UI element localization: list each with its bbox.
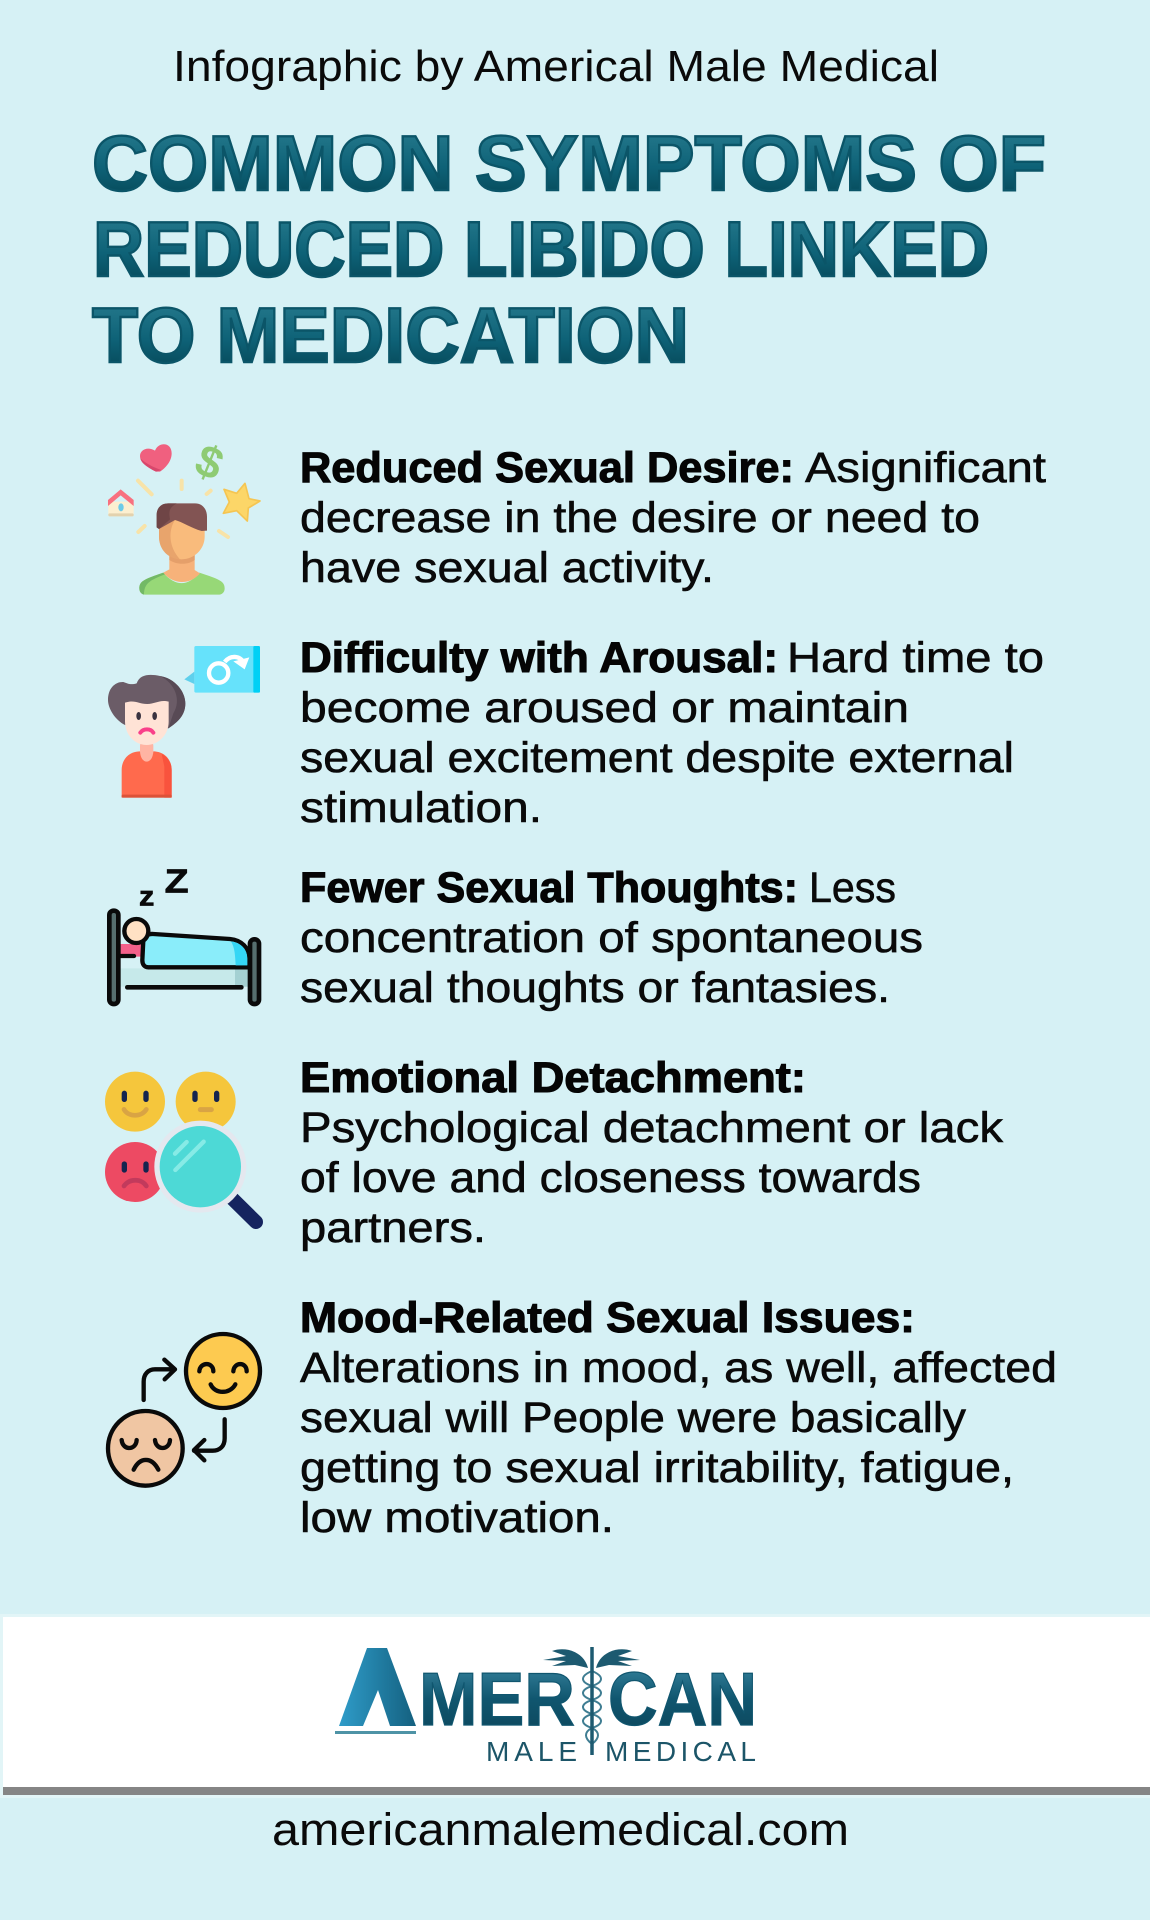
symptom 5: mood-related sexual issues: Alterations in mood, as well, affected (300, 1344, 1057, 1392)
symptom 1: reduced sexual desire: have sexual activity. (300, 544, 714, 592)
title: COMMON SYMPTOMS OF (92, 119, 1046, 207)
symptom 1: reduced sexual desire: Asignificant (805, 444, 1046, 492)
logo: American Male Medical: MALE (486, 1736, 577, 1767)
title (92, 119, 1046, 379)
symptom 3: fewer sexual thoughts: concentration of spontaneous (300, 914, 923, 962)
symptom 4: emotional detachment: partners. (300, 1204, 486, 1252)
icon: emotion faces with magnifying glass (105, 1072, 256, 1222)
icon: mood swing faces with arrows (108, 1334, 260, 1486)
symptom 2: difficulty with arousal: Hard time to (787, 634, 1044, 682)
symptom 4: emotional detachment (300, 1054, 1004, 1252)
logo: American Male Medical: MER (419, 1657, 575, 1741)
symptom 2: difficulty with arousal: become aroused or maintain (300, 684, 909, 732)
symptom 3: fewer sexual thoughts: Fewer Sexual Thoughts: (300, 864, 798, 912)
symptom 1: reduced sexual desire: Reduced Sexual Desire: (300, 444, 794, 492)
icon: person sleeping in bed (109, 864, 259, 1004)
symptom 5: mood-related sexual issues: sexual will People were basically (300, 1394, 967, 1442)
symptom 5: mood-related sexual issues: getting to sexual irritability, fatigue, (300, 1444, 1014, 1492)
symptom 5: mood-related sexual issues: Mood-Related Sexual Issues: (300, 1294, 915, 1342)
symptom 2: difficulty with arousal: stimulation. (300, 784, 542, 832)
icon: person thinking of heart, money, star, home (108, 434, 260, 595)
symptom 2: difficulty with arousal (300, 634, 1044, 832)
logo: American Male Medical: CAN (608, 1657, 757, 1741)
symptom 5: mood-related sexual issues (300, 1294, 1057, 1542)
icon: person sleeping in bed: Z (165, 864, 189, 901)
logo: American Male Medical: MEDICAL (605, 1736, 756, 1767)
symptom 4: emotional detachment: Emotional Detachment: (300, 1054, 806, 1102)
symptom 2: difficulty with arousal: Difficulty with Arousal: (300, 634, 778, 682)
symptom 3: fewer sexual thoughts: sexual thoughts or fantasies. (300, 964, 890, 1012)
symptom 4: emotional detachment: of love and closeness towards (300, 1154, 921, 1202)
icon: person sleeping in bed: z (139, 881, 154, 912)
symptom 4: emotional detachment: Psychological detachment or lack (300, 1104, 1004, 1152)
logo: caduceus (543, 1647, 640, 1755)
footer logo band (0, 1614, 1150, 1798)
website url: americanmalemedical.com (272, 1804, 849, 1855)
icon: sad woman with speech bubble (108, 646, 260, 798)
symptom 3: fewer sexual thoughts: Less (809, 864, 896, 912)
title: REDUCED LIBIDO LINKED (93, 205, 989, 293)
subtitle: Infographic by Americal Male Medical (173, 42, 939, 91)
symptom 1: reduced sexual desire (300, 444, 1046, 592)
icon: person thinking of heart, money, star, home: $ (188, 434, 231, 490)
title: TO MEDICATION (92, 291, 689, 379)
logo: American Male Medical (335, 1647, 757, 1767)
symptom 1: reduced sexual desire: decrease in the desire or need to (300, 494, 980, 542)
symptom 2: difficulty with arousal: sexual excitement despite external (300, 734, 1014, 782)
symptom 3: fewer sexual thoughts (300, 864, 923, 1012)
symptom 5: mood-related sexual issues: low motivation. (300, 1494, 614, 1542)
